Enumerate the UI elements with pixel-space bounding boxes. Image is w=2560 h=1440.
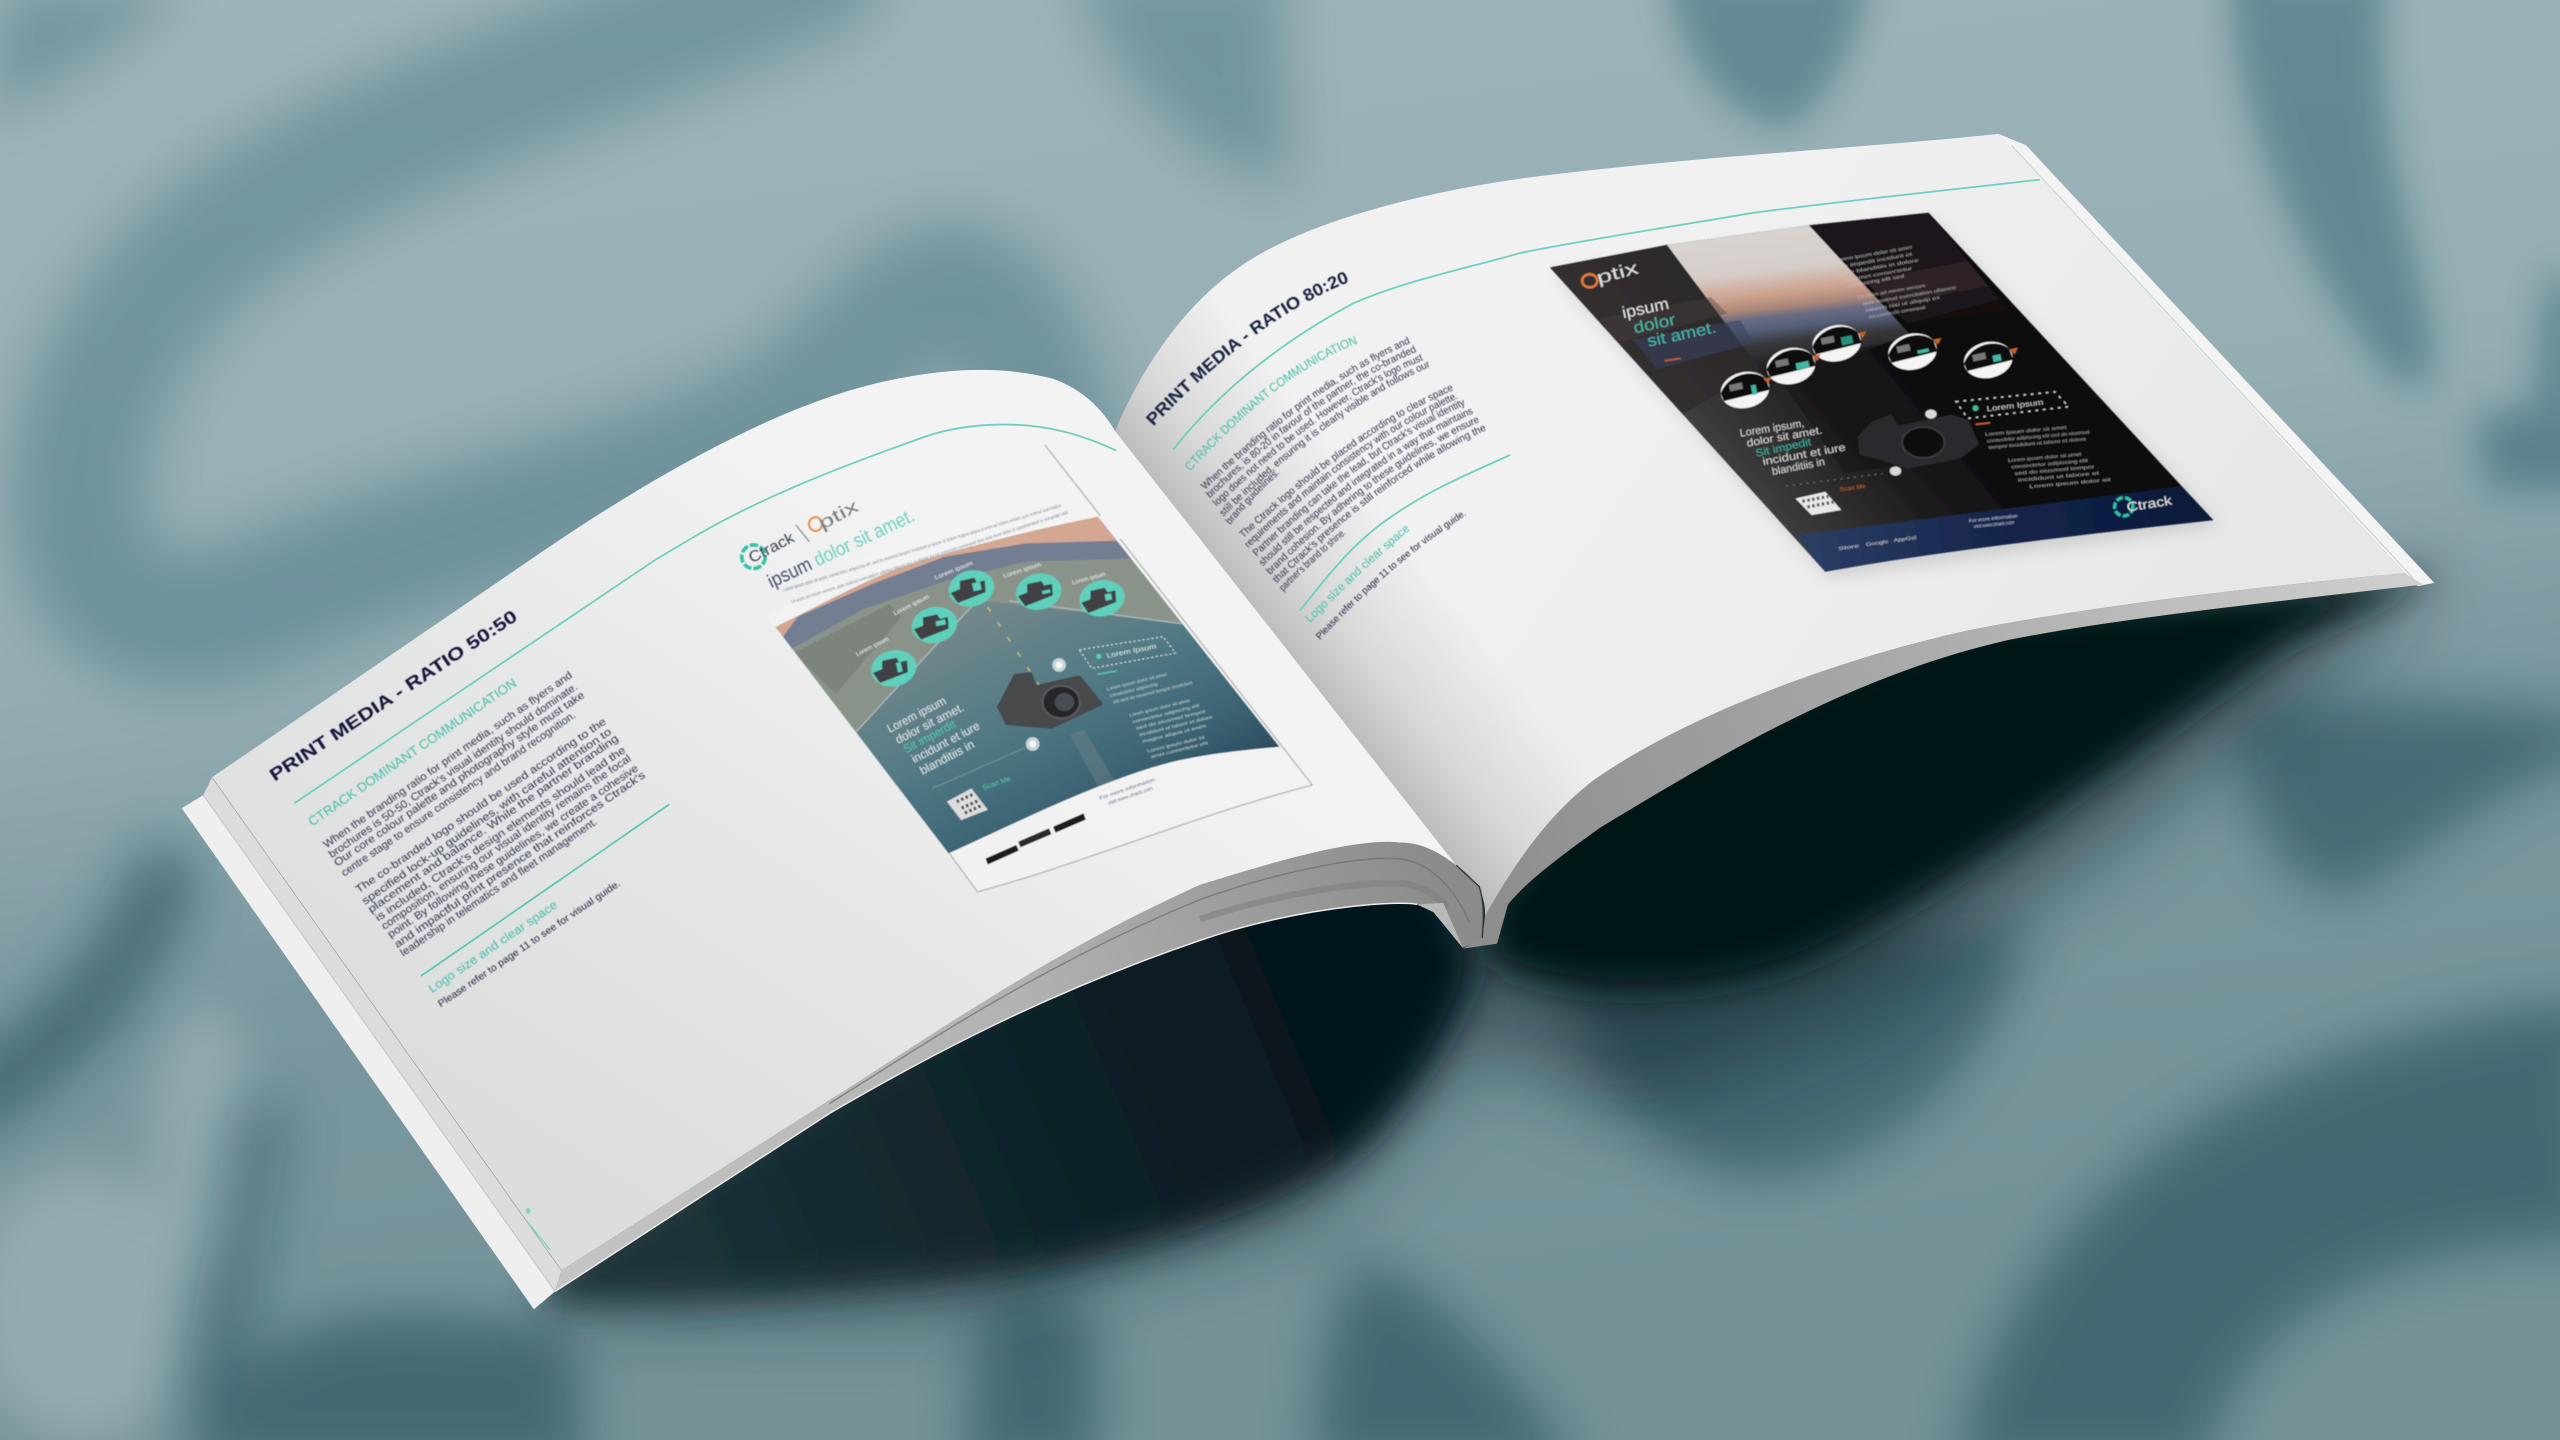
flyer headline: dolor — [1632, 311, 1678, 337]
flyer fine print: ea commodo consequat — [1869, 304, 1927, 320]
optix logo: ptix — [815, 496, 862, 533]
flyer fine print: consectetur adipiscing elit sed do eiusmod — [1987, 429, 2090, 444]
flyer sheet — [767, 445, 1312, 892]
flyer fine print: Lorem ipsum dolor sit amet — [2008, 452, 2082, 464]
flyer main lines: Sit impedit — [1755, 436, 1812, 460]
lower rule, left page — [421, 804, 669, 976]
flyer headline: ipsum dolor sit amet. — [764, 505, 918, 593]
flyer fine print: tempor incididunt ut labore et dolore — [1988, 436, 2087, 451]
flyer fine print: incididunt ut labore et dolore — [1139, 714, 1213, 737]
logo size subheading: Logo size and clear space — [1304, 526, 1410, 623]
left page text — [266, 606, 648, 1010]
subheading: CTRACK DOMINANT COMMUNICATION — [1185, 335, 1358, 470]
flyer hot spots — [1890, 409, 1937, 476]
Ctrack logo: Ctrack — [746, 529, 798, 567]
flyer fine print: Lorem ipsum dolor sit amet — [1834, 244, 1914, 264]
flyer fine print — [1106, 672, 1213, 759]
flyer road photograph — [775, 516, 1280, 854]
flyer fine print: Lorem ipsum dolor sit — [1147, 734, 1206, 754]
optix logo, dark flyer: ptix — [1594, 258, 1640, 288]
body copy: placement and balance. While the partner branding — [366, 733, 621, 916]
dashed callout — [1079, 637, 1176, 674]
flyer main lines: Sit imperdit — [901, 717, 959, 756]
flyer main lines: Lorem ipsum, — [1739, 418, 1805, 440]
left cover edge — [182, 777, 562, 1309]
body copy: logo does not need to be used. However, Ctrack's logo must — [1212, 354, 1424, 507]
footer contact: visit www.ctrack.com — [1107, 786, 1154, 807]
body copy: that Ctrack's presence is still reinforced while allowing the — [1272, 425, 1486, 584]
flyer: dark 80:20 layout — [1549, 212, 2216, 580]
flyer fine print: sed do eiusmod tempor — [1135, 708, 1207, 731]
flyer main lines: incidunt et iure — [1762, 442, 1847, 468]
body copy: The Ctrack logo should be placed according to clear space — [1238, 385, 1454, 537]
body copy: brand cohesion. By adhering to these guidelines, we ensure — [1264, 416, 1480, 575]
flyer fine print: elit sed do eiusmod tempor incididunt — [1113, 680, 1194, 705]
heading: print media 50:50: PRINT MEDIA - RATIO 50:50 — [266, 606, 521, 785]
flyer footer text: visit www.ctrack.com — [1973, 520, 2015, 530]
flyer footer text: For more information — [1969, 513, 2018, 524]
flyer footer text — [1838, 513, 2018, 552]
flyer fine print: incididunt ut labore et — [2018, 470, 2101, 484]
circle labels: Lorem ipsum — [855, 636, 890, 658]
body copy: should still be respected and integrated in a way that maintains — [1259, 408, 1474, 566]
body copy: requirements and maintain consistency with our colour palette. — [1244, 394, 1458, 548]
flyer fine print: adipiscing elit sed — [1847, 273, 1905, 289]
flyer fine print — [1834, 244, 2112, 490]
body copy — [321, 669, 648, 959]
hot spots — [932, 658, 1066, 788]
circle labels — [855, 561, 1106, 658]
page reference note: Please refer to page 11 to see for visual guide. — [436, 878, 623, 1010]
lower rule, right page — [1300, 455, 1510, 611]
flyer fine print: Lorem ipsum dolor sit amet — [1129, 698, 1191, 718]
flyer headline — [1620, 295, 1718, 351]
flyer intro lines: Ut enim ad minim veniam, quis nostrud exercitation ullamco laboris nisi ut aliquip ex ea commodo consequat duis aute irure dolor in reprehenderit in voluptate velit — [791, 510, 1069, 605]
flyer intro lines: Lorem ipsum dolor sit amet, consectetur adipiscing elit, sed do eiusmod tempor incididunt ut labore et dolore magna aliqua ut enim ad minim veniam quis nostrud exercitation — [783, 503, 1062, 594]
flyer footer text: AppGal — [1893, 535, 1917, 544]
right cover edge — [1998, 134, 2434, 586]
flyer main lines: incidunt et iure — [909, 719, 982, 766]
app store badges — [986, 813, 1086, 864]
circle labels: Lorem ipsum — [1003, 562, 1042, 580]
flyer fine print: sed do eiusmod tempor — [2014, 464, 2095, 477]
body copy: centre stage to ensure consistency and brand recognition. — [339, 709, 578, 879]
flyer fine print: laboris nisi ut aliquip ex — [1865, 295, 1941, 314]
flyer main lines — [1739, 418, 1847, 478]
flyer Ctrack logo — [2115, 493, 2174, 516]
optix logo — [809, 496, 862, 533]
page reference note: Please refer to page 11 to see for visual guide. — [1314, 508, 1468, 642]
flyer main lines: dolor sit amet. — [893, 700, 966, 747]
body copy: point. By following these guidelines, we create a cohesive — [386, 762, 641, 941]
footer contact: For more information — [1099, 777, 1156, 802]
body copy: specified lock-up guidelines, with careful attention to — [360, 726, 614, 907]
top rule, right page — [1173, 180, 2040, 449]
flyer main lines: dolor sit amet. — [1746, 425, 1823, 450]
body copy: is included, Ctrack's design elements should lead the — [373, 744, 628, 924]
flyer main lines — [885, 694, 982, 778]
body copy: composition, ensuring our visual identity remains the focal — [379, 753, 634, 932]
body copy: When the branding ratio for print media, such as flyers and — [1200, 336, 1410, 489]
body copy: Our core colour palette and photography style must take — [332, 689, 587, 869]
folio mark — [526, 1208, 550, 1250]
flyer fine print: Lorem ipsum dolor sit — [2029, 477, 2112, 490]
right page — [1115, 134, 2405, 916]
body copy: brand guidelines. — [1224, 471, 1280, 525]
body copy: still be included, ensuring it is clearly visible and follows our — [1220, 361, 1430, 517]
flyer dashcam product — [1860, 416, 1977, 467]
flyer headline: sit amet. — [1646, 318, 1718, 351]
flyer footer text: Store — [1838, 543, 1860, 552]
flyer fine print: Lorem ipsum dolor sit amet — [1106, 672, 1168, 692]
flyer fine print: amet consectetur elit — [1150, 740, 1209, 759]
right page text — [1142, 267, 1488, 642]
flyer fine print: Lorem ipsum dolor sit amet — [1985, 425, 2068, 438]
body copy: Partner branding can take the lead, but Ctrack's visual identity — [1252, 399, 1465, 557]
body copy: partner's brand to shine. — [1280, 530, 1346, 594]
circle labels: Lorem ipsum — [934, 561, 974, 581]
top rule, left page — [294, 425, 1116, 803]
left page block edge — [555, 842, 1483, 1291]
body copy: brochures, is 80-20 in favour of the partner, the co-branded — [1204, 344, 1417, 498]
logo size subheading: Logo size and clear space — [426, 897, 560, 996]
circle labels: Lorem ipsum — [893, 594, 931, 617]
flyer: co-branded 50:50 layout — [742, 445, 1312, 892]
flyer dashed callout — [1956, 392, 2069, 424]
flyer main lines: Lorem ipsum — [885, 694, 948, 736]
flyer Ctrack logo: Ctrack — [2125, 493, 2174, 515]
flyer fine print: consectetur adipiscing — [1109, 681, 1158, 698]
body copy: When the branding ratio for print media, such as flyers and — [321, 669, 575, 851]
body copy: and impactful print presence that reinforces Ctrack's — [392, 769, 648, 951]
body copy: leadership in telematics and fleet management. — [398, 816, 600, 959]
flyer fine print: sit amet consectetur — [1844, 266, 1913, 284]
flyer feature circles — [1717, 321, 2018, 413]
flyer fine print: Ut enim ad minim veniam — [1857, 283, 1926, 301]
body copy: The co-branded logo should be used according to the — [353, 716, 609, 896]
flyer fine print: consectetur adipiscing elit — [1132, 703, 1201, 724]
flyer fine print: iure blanditiis in dolore — [1841, 257, 1920, 277]
dashed callout: Lorem Ipsum — [1106, 643, 1157, 660]
flyer main lines: blanditiis in — [917, 737, 977, 778]
subheading: CTRACK DOMINANT COMMUNICATION — [305, 675, 519, 829]
flyer photo: sky and mountains — [1667, 225, 1910, 385]
flyer fine print: consectetur adipiscing elit — [2011, 458, 2089, 471]
cast shadow under the book — [547, 575, 2441, 1316]
circle labels: Lorem ipsum — [1072, 572, 1106, 586]
body copy: brochures is 50-50, Ctrack's visual identity should dominate. — [327, 681, 580, 861]
flyer dashed callout: Lorem Ipsum — [1986, 398, 2044, 413]
flyer QR code — [1795, 484, 1866, 515]
flyer QR code: Scan Me — [982, 775, 1012, 792]
flyer QR code: Scan Me — [1839, 484, 1866, 493]
footer contact — [1099, 777, 1156, 807]
feature circles — [868, 566, 1128, 691]
heading: print media 80:20: PRINT MEDIA - RATIO 80:20 — [1145, 272, 1348, 426]
dashcam product — [999, 674, 1100, 727]
flyer QR code — [947, 775, 1012, 820]
book — [182, 134, 2434, 1310]
flyer headline: ipsum — [1620, 295, 1670, 322]
flyer fine print: quis nostrud exercitation ullamco — [1862, 285, 1957, 307]
optix logo, dark flyer — [1582, 258, 1640, 288]
right page block edge — [1463, 573, 2423, 949]
body copy — [1199, 336, 1488, 594]
flyer fine print: magna aliqua ut enim — [1142, 723, 1207, 744]
flyer main lines: blanditiis in — [1771, 456, 1826, 478]
flyer fine print: his impedit incidunt et — [1838, 251, 1914, 271]
left page — [212, 370, 1456, 1270]
flyer footer band — [1798, 487, 2220, 581]
flyer footer text: Google — [1866, 539, 1889, 548]
